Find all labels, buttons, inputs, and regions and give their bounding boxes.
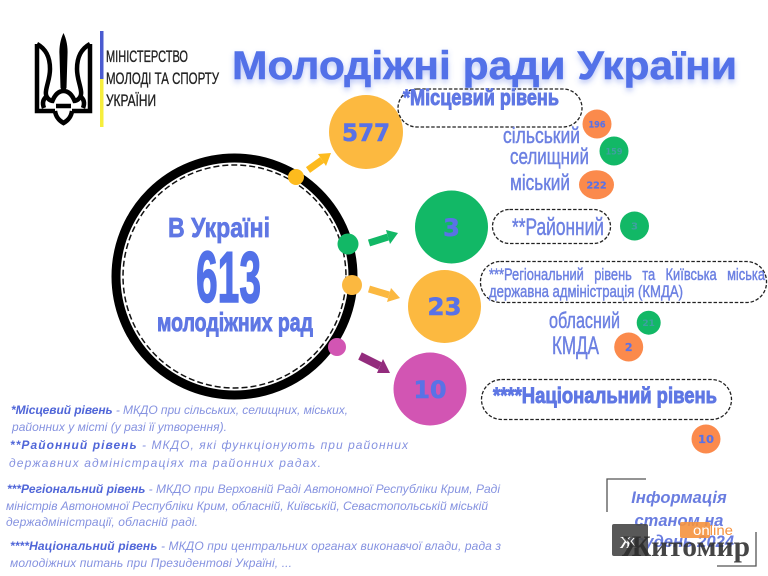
badge: 2: 2 <box>625 341 633 354</box>
info date box: грудень 2024 <box>626 533 734 551</box>
footnote: regional line 2: міністрів Автономної Республіки Крим, обласній, Київській, Севастопольській міській <box>6 499 488 513</box>
central total: молодіжних рад <box>157 307 313 337</box>
flag bar <box>100 31 104 127</box>
arrow: to district <box>369 230 398 244</box>
ministry name: УКРАЇНИ <box>106 91 156 110</box>
badge: national count: 10 <box>698 433 714 446</box>
pill: local level: *Місцевий рівень <box>403 85 559 110</box>
pill: regional level: державна адміністрація (КМДА) <box>489 282 683 301</box>
watermark: Zhytomyr online: Житомир <box>622 530 750 563</box>
arrow: to regional <box>369 288 400 302</box>
icon: trident <box>37 33 90 123</box>
pill: local level <box>398 85 582 127</box>
circle: 10 <box>394 352 466 426</box>
label: KMDA: КМДА <box>552 332 599 360</box>
central total: В Україні <box>168 212 270 243</box>
ministry name: МОЛОДІ ТА СПОРТУ <box>106 69 219 88</box>
central ring <box>116 158 353 395</box>
footnote: regional line 3: держадміністрації, обласній раді. <box>6 515 198 529</box>
circle: 577: 577 <box>342 119 390 147</box>
circle: 10: 10 <box>414 376 446 404</box>
pill: district level <box>492 210 610 244</box>
footnote: national: ****Національний рівень - МКДО при центральних органах виконавчої влади, рада з <box>10 539 501 553</box>
arrow: to national <box>360 356 390 373</box>
badge: settlement count: 159 <box>606 148 622 158</box>
badge: national count <box>692 424 720 454</box>
circle: 23: 23 <box>428 293 462 321</box>
pill: national level <box>482 380 732 420</box>
info date box <box>607 479 756 566</box>
pill: district level: **Районний <box>512 214 604 241</box>
footnote: district: **Районний рівень - МКДО, які функціонують при районних <box>10 438 409 452</box>
circle: 3: 3 <box>443 214 460 242</box>
pill: national level: ****Національний рівень <box>493 383 717 408</box>
regional breakdown <box>549 308 661 362</box>
central total: 613 <box>196 238 261 318</box>
central total <box>157 212 313 337</box>
ministry name <box>106 47 219 110</box>
local breakdown <box>503 110 628 199</box>
circle: 23 <box>408 270 481 343</box>
badge: oblast count: 21 <box>642 319 655 329</box>
footnote: regional: ***Регіональний рівень - МКДО при Верховній Раді Автономної Республіки Крим, Раді <box>7 482 500 496</box>
info date box: Інформація <box>631 489 727 507</box>
watermark: Zhytomyr online: online <box>693 522 733 538</box>
label: urban: міський <box>510 170 570 195</box>
info date box: станом на <box>634 512 724 530</box>
ministry logo <box>37 31 219 127</box>
label: oblast: обласний <box>549 308 620 333</box>
label: settlement: селищний <box>510 144 589 169</box>
footnote: local line 2: районних у місті (у разі її утворення). <box>11 420 227 434</box>
badge: district count: 3 <box>631 222 638 232</box>
title: Молодіжні ради України <box>232 44 737 88</box>
ministry name: МІНІСТЕРСТВО <box>106 47 188 66</box>
circle: 577 <box>329 95 403 169</box>
footnote: national line 2: молодіжних питань при Президентові Україні, ... <box>10 556 292 570</box>
watermark: Zhytomyr online: ж <box>619 528 637 554</box>
badge: district count <box>620 212 649 240</box>
footnote: local: *Місцевий рівень - МКДО при сільських, селищних, міських, <box>11 403 348 417</box>
pill: regional level <box>480 262 766 302</box>
ring connector dots <box>288 169 362 356</box>
badge: 196: 196 <box>588 120 606 130</box>
circle: 3 <box>415 190 488 264</box>
footnote: district line 2: державних адміністраціях та районних радах. <box>9 456 321 470</box>
badge: 222: 222 <box>586 180 606 192</box>
arrow: to local <box>308 153 331 170</box>
label: rural: сільський <box>503 123 580 148</box>
